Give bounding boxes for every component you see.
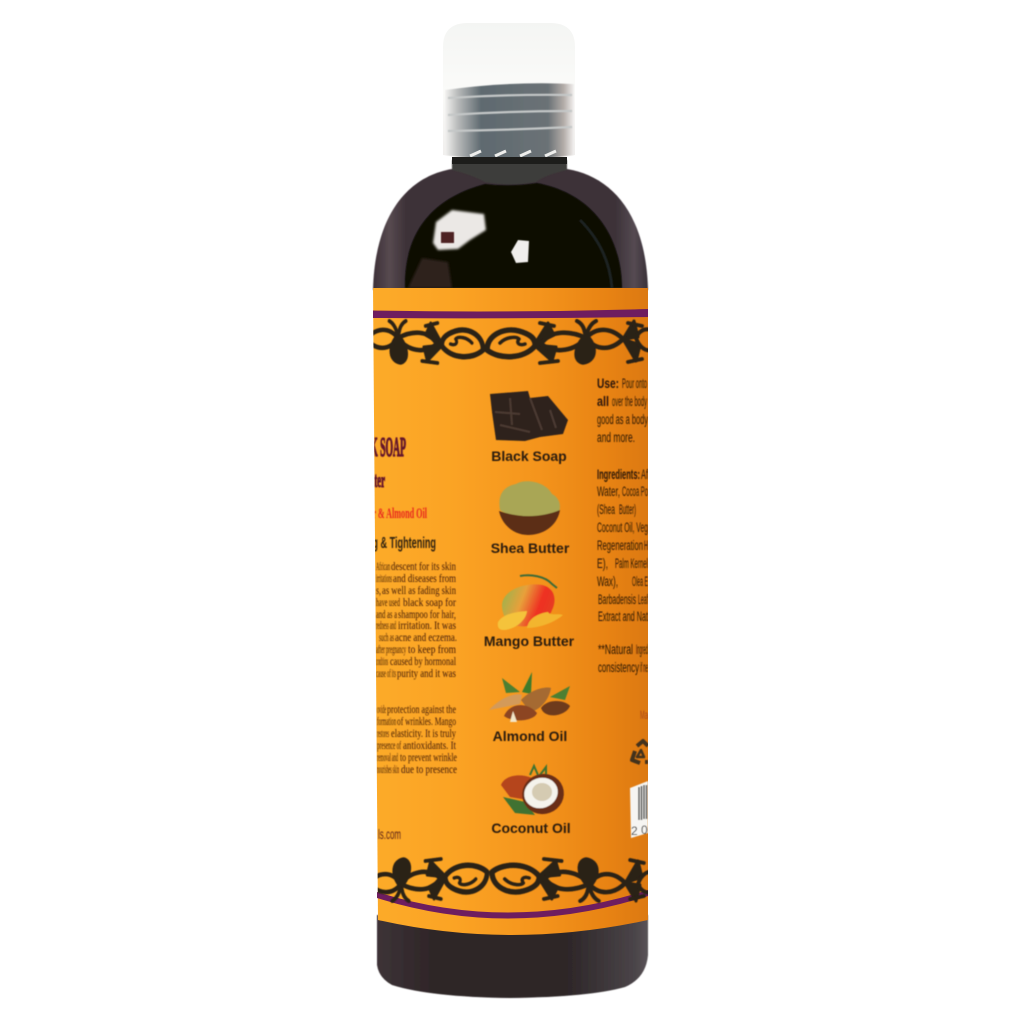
ingredients list: Regeneration: [597, 538, 643, 553]
paragraph two: elasticity. It is truly: [391, 728, 456, 740]
natural ingredients note: [598, 642, 648, 675]
paragraph one: black soap for: [403, 597, 456, 609]
right text panel: use and ingredients: Leaf: [638, 592, 648, 607]
benefit line: Firming & Tightening: [345, 533, 436, 552]
icon: mango: [502, 584, 555, 626]
label: shea butter: Shea Butter: [491, 540, 570, 556]
paragraph one: descent for its skin: [391, 561, 456, 573]
neck collar: [452, 160, 567, 184]
bottle: [373, 23, 648, 998]
paragraph two: formation: [377, 716, 396, 728]
paragraph one: and as a: [376, 609, 397, 621]
icon: black soap: [490, 391, 568, 441]
paragraph one: cause of its: [376, 668, 396, 680]
paragraph one: after pregnancy: [376, 644, 406, 656]
label: black soap: Black Soap: [491, 448, 567, 464]
ingredient: almond oil: [489, 672, 570, 744]
paragraph two: protection against the: [387, 704, 456, 716]
paragraph one: shampoo for hair,: [398, 609, 456, 621]
label: coconut oil: Coconut Oil: [491, 820, 571, 836]
label: almond oil: Almond Oil: [493, 728, 567, 744]
top ornament border: [334, 321, 661, 364]
paragraph two: of wrinkles. Mango: [397, 716, 456, 728]
highlight reflections: [433, 210, 486, 250]
right text panel: use and ingredients: if ne: [640, 660, 648, 675]
top purple stripe: [373, 309, 648, 318]
ingredients list: Coconut Oil, Veg: [597, 520, 648, 535]
paragraph one: as well as fading skin: [382, 585, 456, 597]
ingredients list: (Shea: [597, 502, 615, 517]
paragraph two: due to presence: [401, 764, 457, 776]
ingredient: coconut oil: [491, 766, 571, 836]
paragraph two: ovide: [377, 704, 386, 716]
paragraph one: have used: [376, 597, 400, 609]
paragraph two: antioxidants. It: [403, 740, 457, 752]
ingredient: shea butter: [491, 481, 570, 556]
paragraph one: irritation. It was: [398, 620, 456, 632]
icon: recycling: [632, 741, 648, 763]
paragraph two: removal and: [377, 752, 398, 764]
paragraph one: s,: [376, 585, 381, 597]
paragraph one: purity and it was: [397, 668, 456, 680]
icon: shea butter: [499, 481, 560, 516]
ingredients list: Wax),: [597, 574, 618, 589]
paragraph one: caused by hormonal: [390, 656, 456, 668]
left text panel: product description: [374, 436, 458, 840]
icon: coconut: [501, 775, 532, 800]
use directions: and more.: [597, 430, 635, 445]
paragraph two: to prevent wrinkle: [400, 752, 457, 764]
ingredient: mango butter: [484, 575, 575, 649]
paragraph one: such as: [379, 632, 394, 644]
paragraph two: nourishes skin: [377, 764, 399, 776]
barcode: [629, 780, 648, 839]
glossy shoulder: [373, 157, 648, 290]
use directions: [597, 376, 648, 445]
black dome: [405, 183, 622, 288]
bottle base: [377, 915, 648, 998]
panel: orange label: [373, 288, 648, 935]
paragraph two: presence of: [377, 740, 401, 752]
ingredients list: Extract and Nat: [598, 609, 648, 624]
right text panel: use and ingredients: Cocoa Po: [622, 484, 648, 499]
barcode: 2: [631, 824, 638, 838]
right text panel: use and ingredients: [597, 376, 655, 838]
paragraph one: and diseases from: [393, 573, 456, 585]
product subtitle: Butter: [361, 470, 385, 492]
paragraph two: restores: [377, 728, 389, 740]
text: Made: [640, 708, 654, 722]
paragraph one: conditions: [376, 656, 388, 668]
ingredients list: Af: [641, 467, 648, 482]
paragraph one: irritations: [376, 573, 392, 585]
ingredient: black soap: [490, 391, 568, 464]
use directions: good as a body: [597, 412, 648, 427]
ingredients list: Water,: [597, 484, 620, 499]
ingredients list: [597, 467, 648, 624]
ingredients list: Ingredients:: [597, 467, 640, 482]
red tagline: Butter & Almond Oil: [353, 506, 427, 522]
use directions: Use:: [597, 376, 619, 391]
label: mango butter: Mango Butter: [484, 633, 575, 649]
right text panel: use and ingredients: H: [644, 538, 648, 553]
natural ingredients note: **Natural: [598, 642, 633, 657]
paragraph two: [377, 704, 457, 776]
barcode: 01: [641, 823, 655, 837]
icon: almonds: [502, 678, 520, 693]
ingredients list: Butter): [619, 502, 636, 517]
paragraph one: redness and: [376, 620, 396, 632]
website: ls.com: [378, 826, 401, 842]
right text panel: use and ingredients: Palm Kernel: [615, 556, 648, 571]
right text panel: use and ingredients: over the body: [612, 394, 647, 409]
bottom ornament border: [336, 858, 662, 901]
paragraph one: African: [376, 561, 390, 573]
text: Ingred: [636, 642, 648, 657]
paragraph one: to keep from: [408, 644, 456, 656]
right text panel: use and ingredients: Pour onto: [622, 376, 647, 391]
natural ingredients note: consistency: [598, 660, 639, 675]
right text panel: use and ingredients: Olea E: [632, 574, 648, 589]
ingredients list: Barbadensis: [598, 592, 636, 607]
bottom purple stripe: [377, 890, 648, 919]
product title: BLACK SOAP: [343, 433, 406, 463]
ingredients list: E),: [597, 556, 608, 571]
paragraph one: [376, 561, 457, 680]
cap: [443, 23, 575, 160]
paragraph one: acne and eczema.: [395, 632, 457, 644]
use directions: all: [597, 394, 609, 409]
